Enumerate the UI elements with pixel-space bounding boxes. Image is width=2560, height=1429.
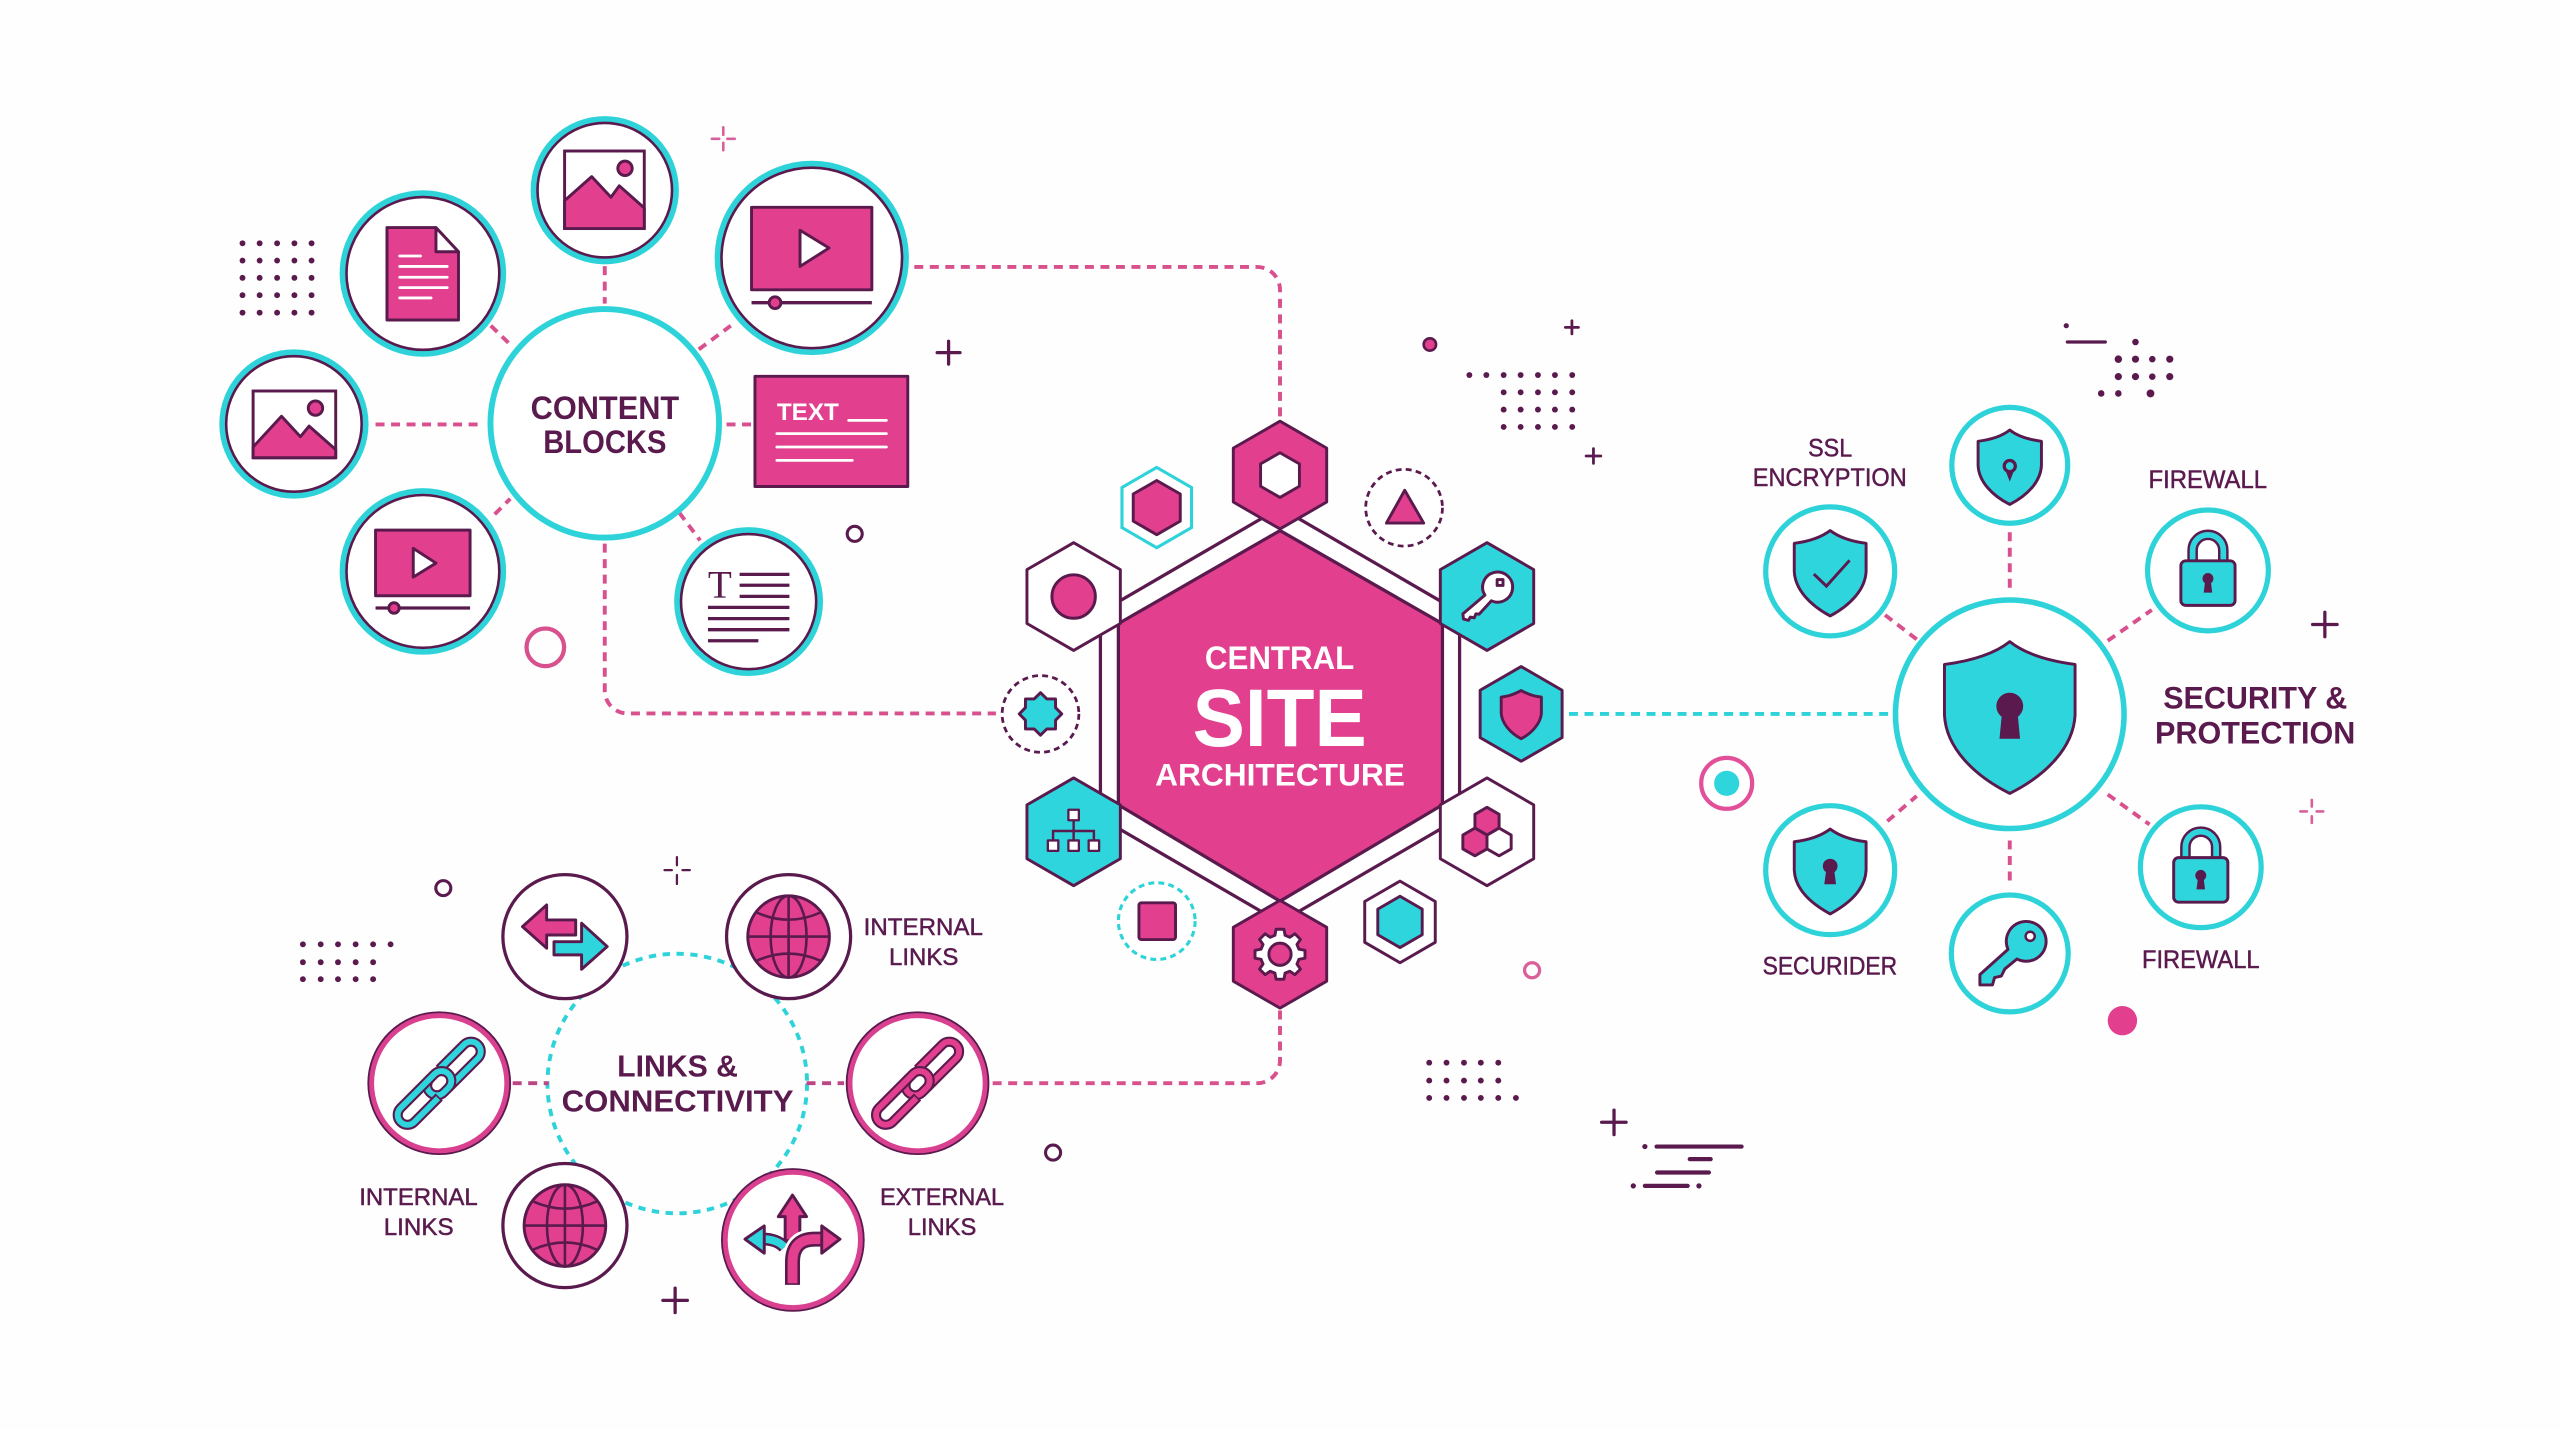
main hexagon with title bbox=[1118, 531, 1442, 901]
icon: image top bbox=[534, 119, 676, 261]
sparkle cross bbox=[2300, 800, 2323, 823]
icon: text block bbox=[755, 376, 908, 487]
icon: typography: T bbox=[708, 564, 732, 607]
hex: gear bbox=[1233, 900, 1327, 1008]
label: securider: SECURIDER bbox=[1763, 953, 1897, 981]
ring bbox=[1046, 1145, 1061, 1160]
panel: links and connectivity bbox=[359, 875, 1004, 1310]
decoration: links accents bbox=[300, 857, 1061, 1313]
hex: key bbox=[1440, 543, 1534, 650]
label: internal links right: INTERNAL bbox=[864, 914, 983, 941]
hex: circle bbox=[1027, 543, 1120, 650]
hub: shield with keyhole bbox=[1895, 600, 2124, 829]
hex: org chart bbox=[1027, 778, 1120, 886]
radial connectors bbox=[376, 266, 753, 540]
plus mark bbox=[1602, 1110, 1626, 1135]
icon: globe top bbox=[727, 875, 851, 999]
panel: security and protection bbox=[1753, 407, 2355, 1012]
hex: top bbox=[1233, 421, 1327, 529]
icon: image left bbox=[222, 352, 366, 496]
sparkle cross bbox=[712, 127, 735, 150]
decoration: central accents bbox=[1424, 321, 1742, 1189]
hex: teal outline bbox=[1122, 467, 1192, 548]
dashed ring bbox=[547, 954, 807, 1213]
icon: small video bbox=[343, 491, 503, 652]
pink dot bbox=[2108, 1006, 2137, 1035]
panel: central site architecture bbox=[1002, 421, 1562, 1008]
radial connectors bbox=[1885, 532, 2152, 884]
hub circle: content blocks bbox=[490, 309, 719, 538]
label: SSL encryption: ENCRYPTION bbox=[1753, 464, 1907, 492]
main hexagon with title: SITE bbox=[1193, 673, 1367, 764]
dot grid bottom bbox=[1426, 1060, 1519, 1101]
label: SSL encryption: SSL bbox=[1808, 435, 1852, 463]
icon: padlock lower bbox=[2140, 807, 2261, 928]
label: external links: LINKS bbox=[908, 1214, 976, 1241]
panel: content blocks bbox=[222, 119, 908, 673]
main hexagon with title: ARCHITECTURE bbox=[1155, 757, 1405, 792]
dot grid bbox=[300, 941, 394, 982]
icon: chain pink bbox=[847, 1013, 988, 1154]
label: firewall lower: FIREWALL bbox=[2142, 946, 2260, 974]
connector: links to central hub bbox=[993, 1009, 1280, 1083]
icon: key bbox=[1951, 895, 2068, 1012]
connector: content blocks video to central hub bbox=[914, 267, 1280, 421]
ring pink bbox=[527, 629, 564, 666]
hub label: CONNECTIVITY bbox=[562, 1086, 793, 1119]
label: internal links left bbox=[359, 1184, 478, 1241]
label: internal links right: LINKS bbox=[889, 944, 958, 971]
side connectors bbox=[513, 1082, 844, 1084]
hub label bbox=[562, 1051, 793, 1119]
label: internal links left: INTERNAL bbox=[359, 1184, 478, 1211]
label: internal links left: LINKS bbox=[384, 1214, 454, 1241]
decoration: content blocks accents bbox=[240, 127, 960, 666]
ring bbox=[436, 881, 451, 896]
title: security and protection: PROTECTION bbox=[2155, 714, 2355, 750]
connector: content blocks to central hub bbox=[605, 544, 996, 713]
connector: central hub to security bbox=[1569, 713, 1891, 715]
icon: typography bbox=[677, 530, 820, 673]
speed lines bbox=[1631, 1144, 1742, 1189]
title: security and protection: SECURITY & bbox=[2163, 680, 2347, 716]
icon: large video bbox=[718, 164, 906, 352]
title: security and protection bbox=[2155, 680, 2355, 750]
sparkle cross bbox=[665, 857, 690, 884]
dashed circle: star bbox=[1002, 676, 1079, 752]
label: external links bbox=[880, 1184, 1004, 1241]
pink dot bbox=[1424, 338, 1436, 351]
hex: cluster bbox=[1440, 778, 1534, 886]
plus mark bbox=[2313, 612, 2337, 637]
ring bbox=[1525, 963, 1540, 978]
label: firewall top: FIREWALL bbox=[2149, 466, 2267, 494]
label: internal links right bbox=[864, 914, 983, 971]
target ring bbox=[1701, 758, 1752, 809]
icon: two-way arrows bbox=[503, 875, 627, 999]
hub label: LINKS & bbox=[617, 1051, 738, 1084]
icon: padlock firewall bbox=[2148, 510, 2268, 631]
dots and dash bbox=[2064, 323, 2173, 397]
icon: SSL shield bbox=[1766, 507, 1895, 636]
icon: shield keyhole lower bbox=[1766, 806, 1895, 935]
dot grid bbox=[240, 240, 314, 316]
outer hexagon frame bbox=[1100, 508, 1460, 922]
main hexagon with title: CENTRAL bbox=[1205, 639, 1354, 676]
decoration: security accents bbox=[1701, 323, 2337, 1035]
plus mark bbox=[937, 341, 960, 364]
icon: document bbox=[343, 193, 503, 354]
dashed circle: triangle bbox=[1366, 469, 1442, 546]
label: external links: EXTERNAL bbox=[880, 1184, 1004, 1211]
label: SSL encryption bbox=[1753, 435, 1907, 492]
dot grid bbox=[1466, 372, 1575, 430]
ring small bbox=[847, 526, 862, 541]
icon: fork arrows bbox=[722, 1169, 863, 1310]
icon: globe lower bbox=[503, 1164, 627, 1288]
icon: shield with keyhole top bbox=[1952, 407, 2068, 523]
icon: text block: TEXT bbox=[777, 399, 839, 426]
plus mark bbox=[663, 1288, 687, 1313]
hub circle: content blocks: CONTENT bbox=[531, 390, 680, 426]
hub circle: content blocks: BLOCKS bbox=[543, 424, 666, 460]
plus mark bbox=[1565, 321, 1578, 334]
dashed circle: square bbox=[1118, 883, 1195, 959]
icon: chain teal bbox=[369, 1013, 510, 1154]
hex: inner teal bbox=[1365, 881, 1435, 963]
plus mark bbox=[1586, 449, 1601, 463]
hex: shield bbox=[1480, 667, 1562, 761]
